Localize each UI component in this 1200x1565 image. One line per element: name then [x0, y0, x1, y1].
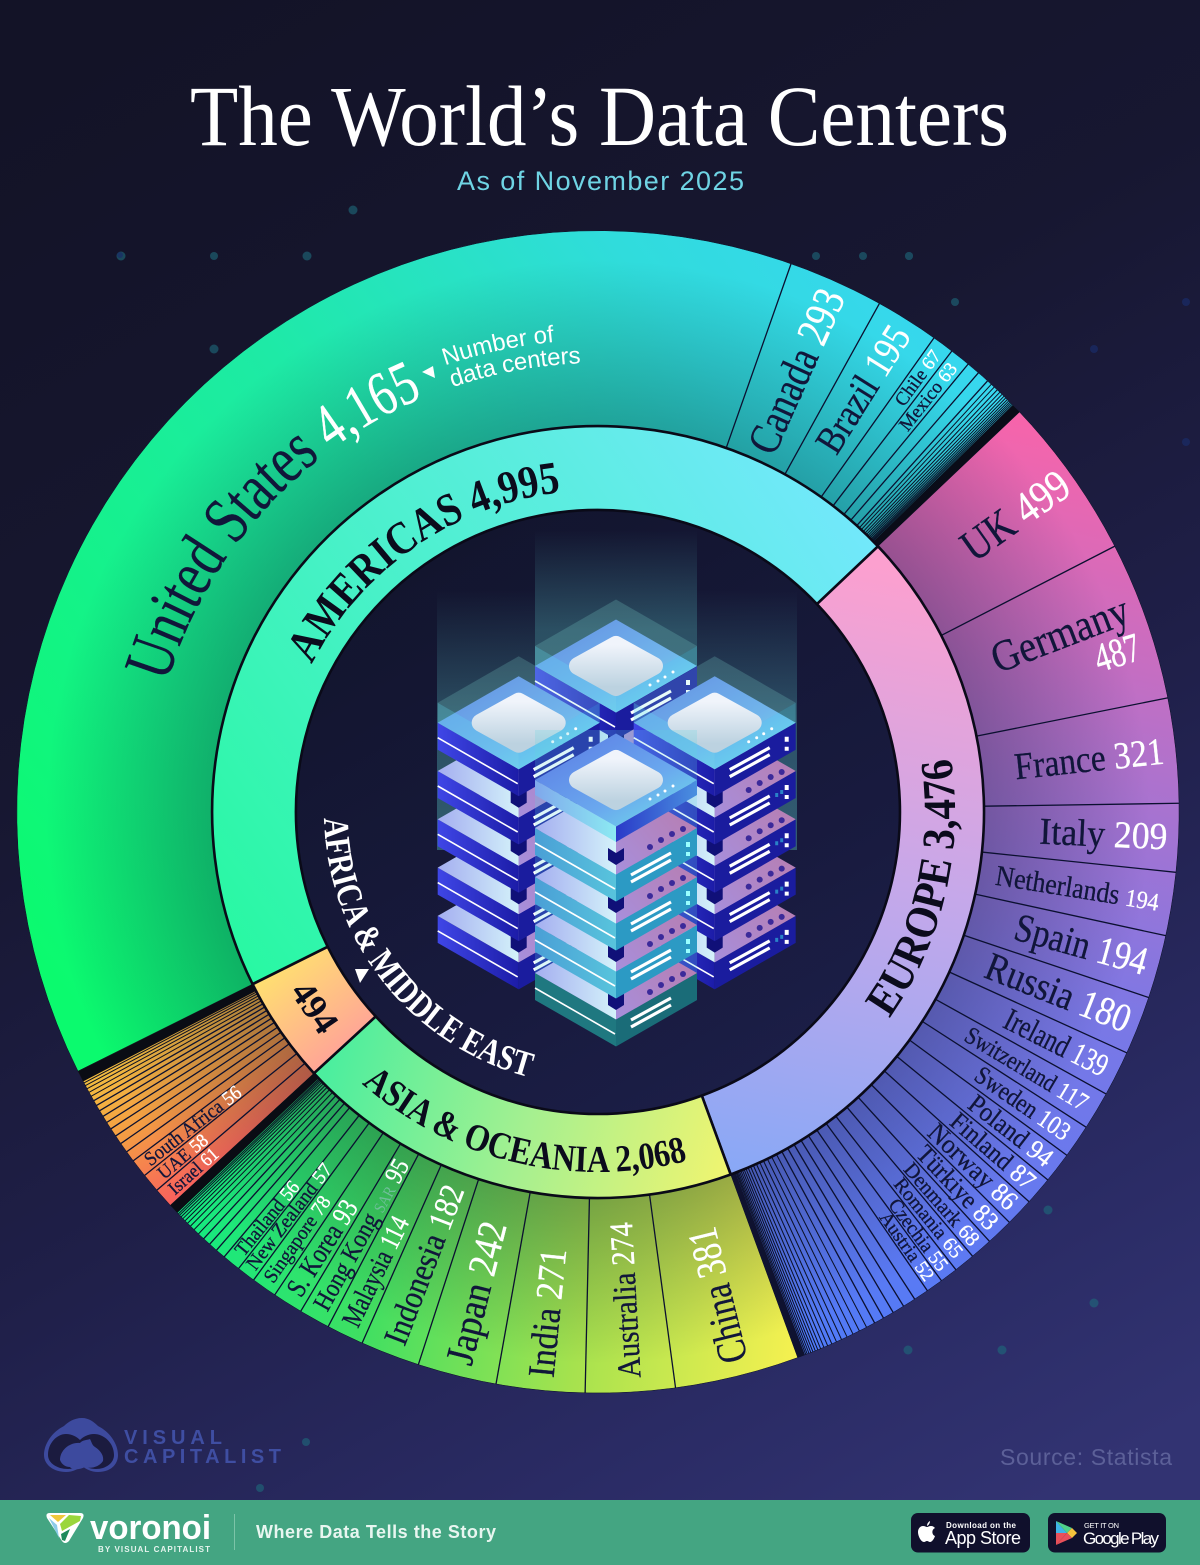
label: Mexico: Mexico 63 [895, 359, 962, 435]
badge: Google Play [1048, 1513, 1166, 1552]
annotation: number of data centers [442, 324, 580, 386]
region label: Asia & Oceania: ASIA & OCEANIA 2,068 [362, 1070, 686, 1176]
label: Russia: Russia 180 [979, 943, 1138, 1041]
label: Brazil: Brazil 195 [806, 317, 920, 461]
label: Norway: Norway 86 [922, 1117, 1024, 1216]
label: Switzerland: Switzerland 117 [960, 1022, 1093, 1117]
label: Chile: Chile 67 [891, 346, 946, 410]
badge: App Store: App Store [945, 1528, 1021, 1548]
label: Indonesia: Indonesia 182 [377, 1180, 472, 1350]
brand name: voronoi [90, 1509, 211, 1547]
outer ring: country segments [17, 231, 1179, 1393]
label: Austria: Austria 52 [875, 1208, 938, 1285]
label: Denmark: Denmark 68 [899, 1157, 985, 1251]
footer bar [0, 1500, 1200, 1565]
label: South Africa: South Africa 56 [140, 1082, 246, 1171]
label: Singapore: Singapore 78 [260, 1192, 336, 1287]
label: Sweden: Sweden 103 [969, 1060, 1076, 1146]
label: Israel: Israel 61 [164, 1144, 223, 1199]
label: Hong Kong SAR: Hong Kong SAR 95 [307, 1154, 415, 1316]
badge: Google Play: GET IT ON [1084, 1521, 1119, 1530]
label: Japan: Japan 242 [436, 1216, 516, 1369]
label: Poland: Poland 94 [963, 1088, 1060, 1173]
label: Canada: Canada 293 [738, 281, 855, 461]
subtitle: As of November 2025 [457, 166, 744, 196]
chart labels [124, 281, 1168, 1379]
region value: Africa & Middle East: 494 [283, 974, 347, 1041]
label: Germany value: 487 [1088, 624, 1146, 681]
label: Italy: Italy 209 [1039, 811, 1168, 858]
region label: Africa & Middle East: AFRICA & MIDDLE EAST [324, 818, 536, 1076]
label: Spain: Spain 194 [1010, 904, 1153, 984]
label: France: France 321 [1012, 731, 1166, 788]
title: The World’s Data Centers [190, 68, 1009, 164]
logo: Visual Capitalist [44, 1418, 281, 1472]
label: Netherlands: Netherlands 194 [993, 860, 1162, 918]
region label: Americas: AMERICAS 4,995 [290, 462, 558, 664]
label: New Zealand: New Zealand 57 [242, 1159, 337, 1274]
badge: App Store: Download on the [946, 1521, 1017, 1530]
annotation: number of data centers: Number of [442, 324, 554, 365]
source: Source: Statista [1000, 1444, 1172, 1470]
badge: Google Play: Google Play [1083, 1529, 1160, 1548]
label: Romania: Romania 65 [889, 1174, 967, 1263]
label: UK: UK 499 [951, 460, 1080, 571]
label: Czechia: Czechia 55 [884, 1195, 952, 1276]
label: Thailand: Thailand 56 [231, 1177, 304, 1261]
region label: Europe: EUROPE 3,476 [864, 760, 962, 1018]
icon: voronoi logo [46, 1513, 84, 1543]
label: China: China 381 [680, 1223, 758, 1368]
icon: pointer triangle to 494 [355, 969, 369, 983]
center illustration: isometric server racks [437, 530, 797, 1046]
label: S. Korea: S. Korea 93 [281, 1194, 365, 1302]
icon: pointer triangle to number [422, 366, 435, 378]
label: Germany: Germany [984, 585, 1136, 683]
label: United States: United States 4,165 [124, 362, 418, 674]
label: India: India 271 [521, 1247, 575, 1379]
label: Türkiye: Türkiye 83 [911, 1139, 1005, 1236]
badge: App Store [911, 1513, 1030, 1552]
label: Ireland: Ireland 139 [998, 1001, 1115, 1083]
logo: Visual Capitalist: VISUAL [124, 1427, 222, 1449]
label: Finland: Finland 87 [944, 1106, 1041, 1196]
label: UAE: UAE 58 [154, 1130, 213, 1184]
brand byline: BY VISUAL CAPITALIST [98, 1545, 210, 1554]
logo: Visual Capitalist: CAPITALIST [124, 1446, 281, 1468]
tagline: Where Data Tells the Story [256, 1522, 496, 1542]
label: Australia: Australia 274 [604, 1221, 649, 1379]
inner ring: regional totals [212, 426, 984, 1198]
label: Malaysia: Malaysia 114 [336, 1211, 416, 1332]
annotation: number of data centers: data centers [450, 350, 580, 386]
